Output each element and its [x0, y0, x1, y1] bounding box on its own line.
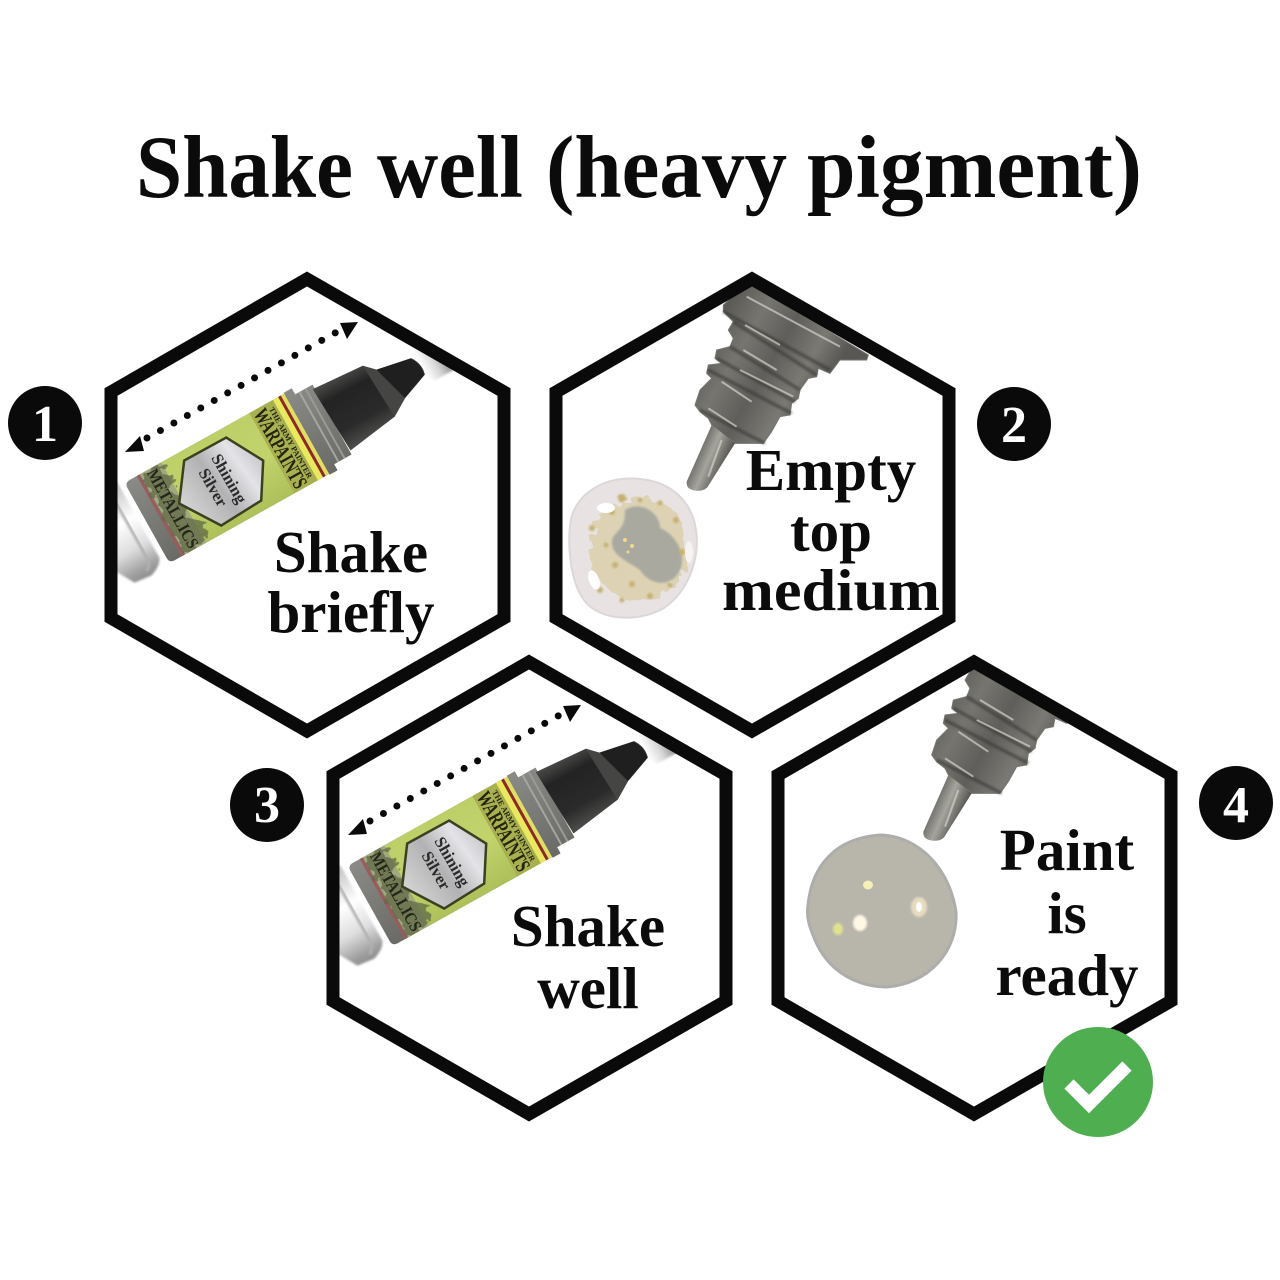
title: [136, 119, 1142, 217]
paint name plate: Silver: [195, 465, 232, 510]
label: well: [537, 955, 639, 1021]
label: top: [790, 498, 872, 564]
illustration: mixed paint drop: [807, 835, 956, 987]
illustration: separated paint drop: [569, 479, 697, 618]
title: well: [377, 119, 523, 217]
paint name plate: Shining: [430, 833, 474, 890]
label: [267, 519, 435, 645]
step number 1: [8, 386, 82, 460]
title: (heavy: [546, 119, 787, 217]
step number 4: 4: [1223, 777, 1249, 834]
illustration: paint bottle: WARPAINTS: [249, 404, 312, 493]
paint name plate: Silver: [418, 848, 455, 893]
label: Shake: [274, 519, 428, 585]
label: is: [1047, 880, 1087, 946]
label: [995, 817, 1139, 1008]
paint name plate: [402, 821, 486, 909]
hexagon outline: [111, 279, 504, 731]
hexagon outline: [556, 279, 949, 731]
panel: step 2 empty top medium: [556, 279, 949, 731]
hexagon outline: [333, 662, 726, 1114]
illustration: paint bottle: THE ARMY PAINTER: [490, 789, 537, 863]
label: ready: [995, 942, 1139, 1008]
arrow: shake direction: [125, 322, 358, 452]
title: pigment): [807, 119, 1142, 217]
label: medium: [722, 557, 940, 623]
hexagon outline: [778, 662, 1171, 1114]
paint name plate: Shining: [207, 450, 251, 507]
paint name plate: [179, 438, 263, 526]
illustration: paint bottle: METALLICS: [366, 849, 426, 935]
step number 3: 3: [254, 777, 280, 834]
step number 1: 1: [32, 396, 58, 453]
label: [511, 893, 665, 1021]
label: [722, 437, 940, 623]
illustration: dropper nozzle: [923, 670, 1068, 841]
label: Empty: [746, 437, 916, 503]
step number 4: [1199, 766, 1273, 840]
step number 3: [230, 768, 304, 842]
panel: step 4 paint is ready: [778, 635, 1171, 1114]
step number 2: 2: [1001, 397, 1027, 454]
illustration: paint bottle: [118, 349, 454, 584]
panel: step 1 shake briefly: [70, 279, 504, 731]
label: Paint: [1000, 817, 1135, 883]
illustration: paint bottle: WARPAINTS: [472, 787, 535, 876]
arrow: shake direction: [348, 705, 581, 835]
panel: step 3 shake well: [293, 662, 726, 1114]
illustration: paint bottle: THE ARMY PAINTER: [267, 406, 314, 480]
label: briefly: [267, 579, 435, 645]
illustration: dropper nozzle: [687, 285, 868, 491]
title: Shake: [136, 119, 353, 217]
label: Shake: [511, 893, 665, 959]
step number 2: [977, 387, 1051, 461]
illustration: paint bottle: METALLICS: [143, 466, 203, 552]
icon: green check mark: [1043, 1027, 1153, 1137]
illustration: paint bottle: [340, 732, 677, 967]
